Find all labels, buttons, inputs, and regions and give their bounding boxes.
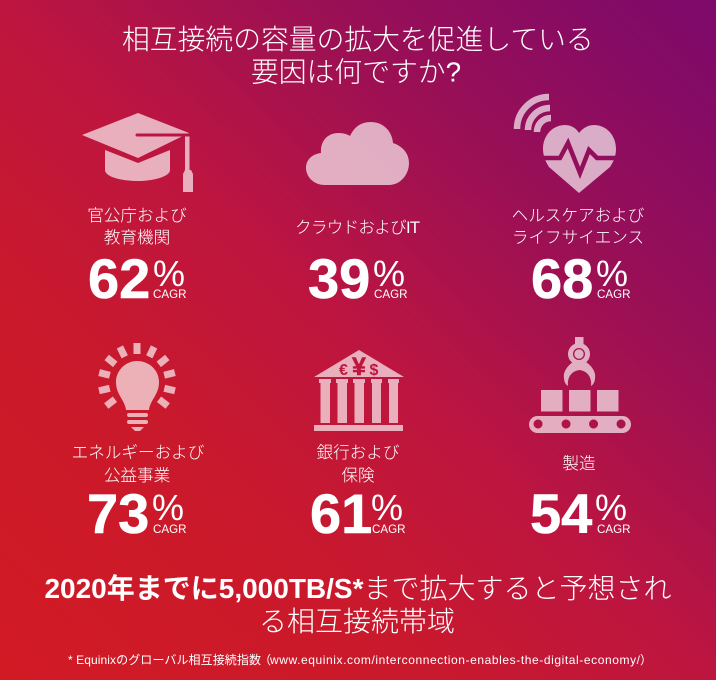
panel: government and education (82, 113, 193, 310)
footnote: ） (640, 653, 652, 667)
label: 製造 (562, 454, 596, 473)
headline statement: 2020年までに5,000TB/S*まで拡大すると予想され (44, 573, 672, 604)
label: クラウドおよびIT (295, 218, 420, 237)
stat: 54% CAGR: CAGR (597, 523, 630, 536)
panel: energy and utilities (72, 343, 205, 545)
stat: 39% CAGR (308, 247, 408, 310)
stat: 68% CAGR: CAGR (597, 288, 630, 301)
icon: bank building with currencies: € (339, 362, 348, 379)
footnote: （ (259, 653, 271, 667)
stat: 61% CAGR: CAGR (372, 523, 406, 536)
stat: 73% CAGR (87, 482, 186, 545)
stat: 68% CAGR: % (596, 253, 628, 294)
label: 教育機関 (104, 228, 170, 247)
stat: 61% CAGR: % (371, 487, 403, 528)
icon: heart with wireless signal (517, 97, 618, 193)
icon: bank building with currencies: ¥ (352, 353, 366, 381)
label: ヘルスケアおよび (512, 206, 645, 225)
label: エネルギーおよび (72, 443, 205, 462)
stat: 62% CAGR: 62 (88, 247, 150, 310)
stat: 39% CAGR: CAGR (374, 288, 408, 301)
stat: 62% CAGR: CAGR (153, 288, 186, 301)
stat: 68% CAGR (531, 247, 630, 310)
panel: healthcare and life sciences (512, 97, 645, 310)
stat: 73% CAGR: CAGR (153, 523, 186, 536)
headline statement (44, 573, 672, 637)
stat: 73% CAGR: 73 (87, 482, 149, 545)
footnote (68, 652, 652, 667)
icon: bank building with currencies: $ (370, 362, 379, 379)
stat: 39% CAGR: 39 (308, 247, 370, 310)
stat: 39% CAGR: % (373, 253, 405, 294)
label: 公益事業 (104, 466, 170, 485)
panel: cloud and IT (295, 122, 420, 310)
label: ライフサイエンス (512, 228, 644, 247)
icon: bank building with currencies (314, 350, 404, 431)
label: 銀行および (317, 443, 400, 462)
label: 官公庁および (87, 206, 187, 225)
stat: 61% CAGR: 61 (310, 482, 372, 545)
panel: manufacturing (529, 337, 631, 545)
title: 相互接続の容量の拡大を促進している (122, 24, 594, 55)
title (122, 24, 594, 88)
stat: 62% CAGR: % (153, 253, 185, 294)
stat: 54% CAGR: 54 (530, 482, 592, 545)
stat: 61% CAGR (310, 482, 406, 545)
icon: light bulb (98, 343, 176, 431)
icon: graduation cap (82, 113, 193, 192)
icon: robotic arm and conveyor (529, 337, 631, 433)
stat: 54% CAGR (530, 482, 630, 545)
icon: cloud (306, 122, 409, 185)
headline statement: る相互接続帯域 (259, 606, 455, 637)
stat: 68% CAGR: 68 (531, 247, 593, 310)
panel: banking and insurance (310, 350, 406, 545)
stat: 62% CAGR (88, 247, 186, 310)
footnote: * Equinixのグローバル相互接続指数 (68, 652, 261, 667)
stat: 54% CAGR: % (595, 487, 627, 528)
footnote: www.equinix.com/interconnection-enables-the-digital-economy/ (269, 653, 641, 667)
title: 要因は何ですか? (251, 56, 461, 88)
stat: 73% CAGR: % (152, 487, 184, 528)
label: 保険 (341, 466, 375, 485)
